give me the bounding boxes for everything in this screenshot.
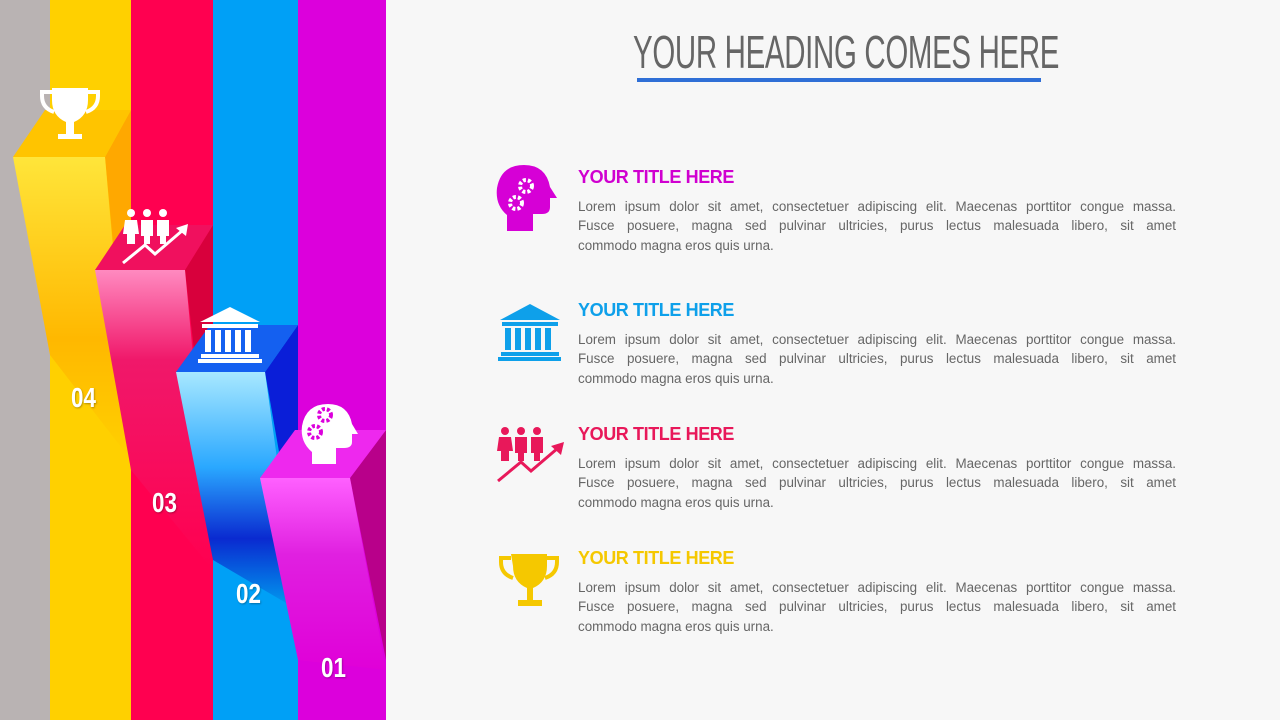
number 01: 01 [321, 652, 346, 683]
number 02: 02 [236, 578, 261, 609]
icon: head gears on step 01 [302, 404, 358, 464]
body text [578, 332, 1176, 386]
body text: Lorem ipsum dolor sit amet, consectetuer adipiscing elit. Maecenas porttitor congue massa. [578, 199, 1176, 214]
body text: Lorem ipsum dolor sit amet, consectetuer adipiscing elit. Maecenas porttitor congue massa. [578, 456, 1176, 471]
icon: people growth on step 03 [123, 209, 188, 263]
heading underline [637, 78, 1041, 82]
step 01 magenta [260, 430, 386, 670]
body text: Fusce posuere, magna sed pulvinar ultricies, purus lectus malesuada libero, sit amet [578, 475, 1176, 490]
icon: bank [498, 304, 561, 361]
body text: Lorem ipsum dolor sit amet, consectetuer adipiscing elit. Maecenas porttitor congue massa. [578, 580, 1176, 595]
body text: Lorem ipsum dolor sit amet, consectetuer adipiscing elit. Maecenas porttitor congue massa. [578, 332, 1176, 347]
item 3 [497, 424, 1176, 510]
icon: people growth [497, 427, 564, 482]
body text: commodo magna eros quis urna. [578, 371, 774, 386]
step 02 blue [176, 325, 298, 610]
body text [578, 199, 1176, 253]
body text: Fusce posuere, magna sed pulvinar ultricies, purus lectus malesuada libero, sit amet [578, 351, 1176, 366]
body text [578, 580, 1176, 634]
body text: commodo magna eros quis urna. [578, 495, 774, 510]
icon: head with gears [496, 165, 557, 231]
body text: Fusce posuere, magna sed pulvinar ultricies, purus lectus malesuada libero, sit amet [578, 599, 1176, 614]
step 03 red [95, 225, 213, 570]
icon: trophy on step 04 [42, 88, 98, 139]
body text: commodo magna eros quis urna. [578, 238, 774, 253]
icon: bank on step 02 [198, 307, 262, 363]
title: YOUR TITLE HERE [578, 300, 734, 320]
left 3D stair graphic [0, 0, 386, 720]
item 4 [499, 548, 1176, 634]
heading: YOUR HEADING COMES HERE [633, 26, 1059, 78]
title: YOUR TITLE HERE [578, 424, 734, 444]
title: YOUR TITLE HERE [578, 167, 734, 187]
title: YOUR TITLE HERE [578, 548, 734, 568]
item 1 [496, 165, 1176, 253]
number 03: 03 [152, 487, 177, 518]
body text: commodo magna eros quis urna. [578, 619, 774, 634]
step 04 yellow [13, 110, 131, 460]
body text [578, 456, 1176, 510]
number 04: 04 [71, 382, 96, 413]
item 2 [498, 300, 1176, 386]
body text: Fusce posuere, magna sed pulvinar ultricies, purus lectus malesuada libero, sit amet [578, 218, 1176, 233]
icon: trophy [499, 554, 559, 606]
